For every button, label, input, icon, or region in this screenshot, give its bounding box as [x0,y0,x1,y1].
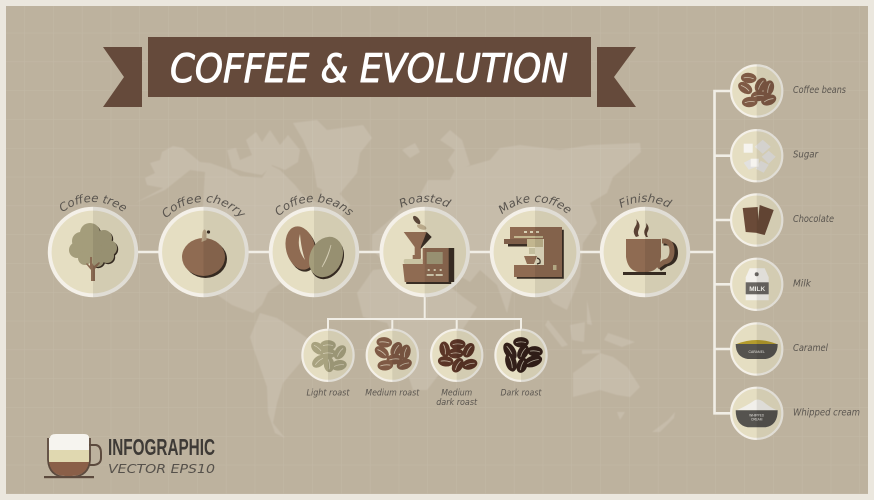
map: North America [135,146,350,313]
label: Roasted [400,194,452,208]
title: COFFEE & EVOLUTION [170,47,568,92]
icon: milk carton: MILK [749,286,765,293]
icon: medium dark beans [437,339,479,375]
option: Coffee beans [731,64,846,118]
label [436,388,478,408]
label: Chocolate [793,214,834,225]
label: Coffee cherry [162,194,246,217]
icon: tree [69,223,118,281]
icon: layered cup [44,434,101,478]
map: Eurasia [372,143,641,313]
label: Coffee beans [276,194,353,215]
option: Milk [731,258,811,311]
icon: cherry [182,230,227,278]
option: Chocolate [731,193,834,247]
title ribbon [103,37,636,107]
roast: Medium roast [365,329,420,398]
map: Scandinavia and Iceland [402,130,470,172]
label: Make coffee [498,196,571,214]
option: Caramel [731,322,828,376]
step: Roasted [380,194,470,298]
option: Sugar [731,129,819,182]
label: Caramel [793,343,828,354]
icon: roaster [403,215,454,284]
label: dark roast [436,398,478,408]
option: Whipped cream [731,387,860,440]
label: Milk [793,278,811,289]
roast: Medium dark roast [431,329,483,408]
map: New Zealand [652,412,675,432]
map: Australia [573,353,640,420]
map: Africa [357,267,477,390]
step: Finished [600,194,690,298]
map: South America [250,313,310,438]
step: Make coffee [490,196,580,298]
label: Medium roast [365,388,420,398]
icon: whipped cream bowl: WHIPPED [749,413,765,417]
icon: whipped cream bowl [736,400,778,427]
label: Coffee beans [793,85,846,96]
ribbon band [148,37,591,97]
label: Medium [441,388,472,398]
map: Maritime Asia [545,300,635,354]
icon: medium beans [372,336,413,372]
label: Dark roast [500,388,542,398]
map: Canadian archipelago [227,130,300,175]
label: Finished [619,194,673,208]
roast: Dark roast [495,329,548,398]
icon: beans [736,72,778,108]
label: Whipped cream [793,407,860,418]
icon: two beans [281,223,350,285]
logo subtitle: VECTOR EPS10 [108,461,215,476]
label: Coffee tree [60,194,126,212]
step: Coffee cherry [158,194,249,298]
step: Coffee tree [48,194,138,298]
icon: espresso machine [504,227,564,279]
step: Coffee beans [268,194,360,298]
map: Greenland [293,120,372,197]
label: Sugar [793,150,819,161]
logo [44,434,215,478]
map: Madagascar [468,346,478,376]
connector lines [138,91,756,413]
icon: light beans [309,339,349,373]
label: Light roast [306,388,350,398]
icon: coffee cup [623,219,676,275]
icon: dark beans [500,337,544,374]
ribbon right tail [597,47,636,107]
logo title: INFOGRAPHIC [108,434,215,460]
ribbon left tail [103,47,142,107]
icon: sugar cubes [744,140,776,173]
roast: Light roast [302,329,355,398]
icon: caramel bowl: CARAMEL [748,350,765,354]
world map [135,120,675,438]
icon: whipped cream bowl: CREAM [751,417,763,421]
icon: chocolate bars [743,205,774,235]
